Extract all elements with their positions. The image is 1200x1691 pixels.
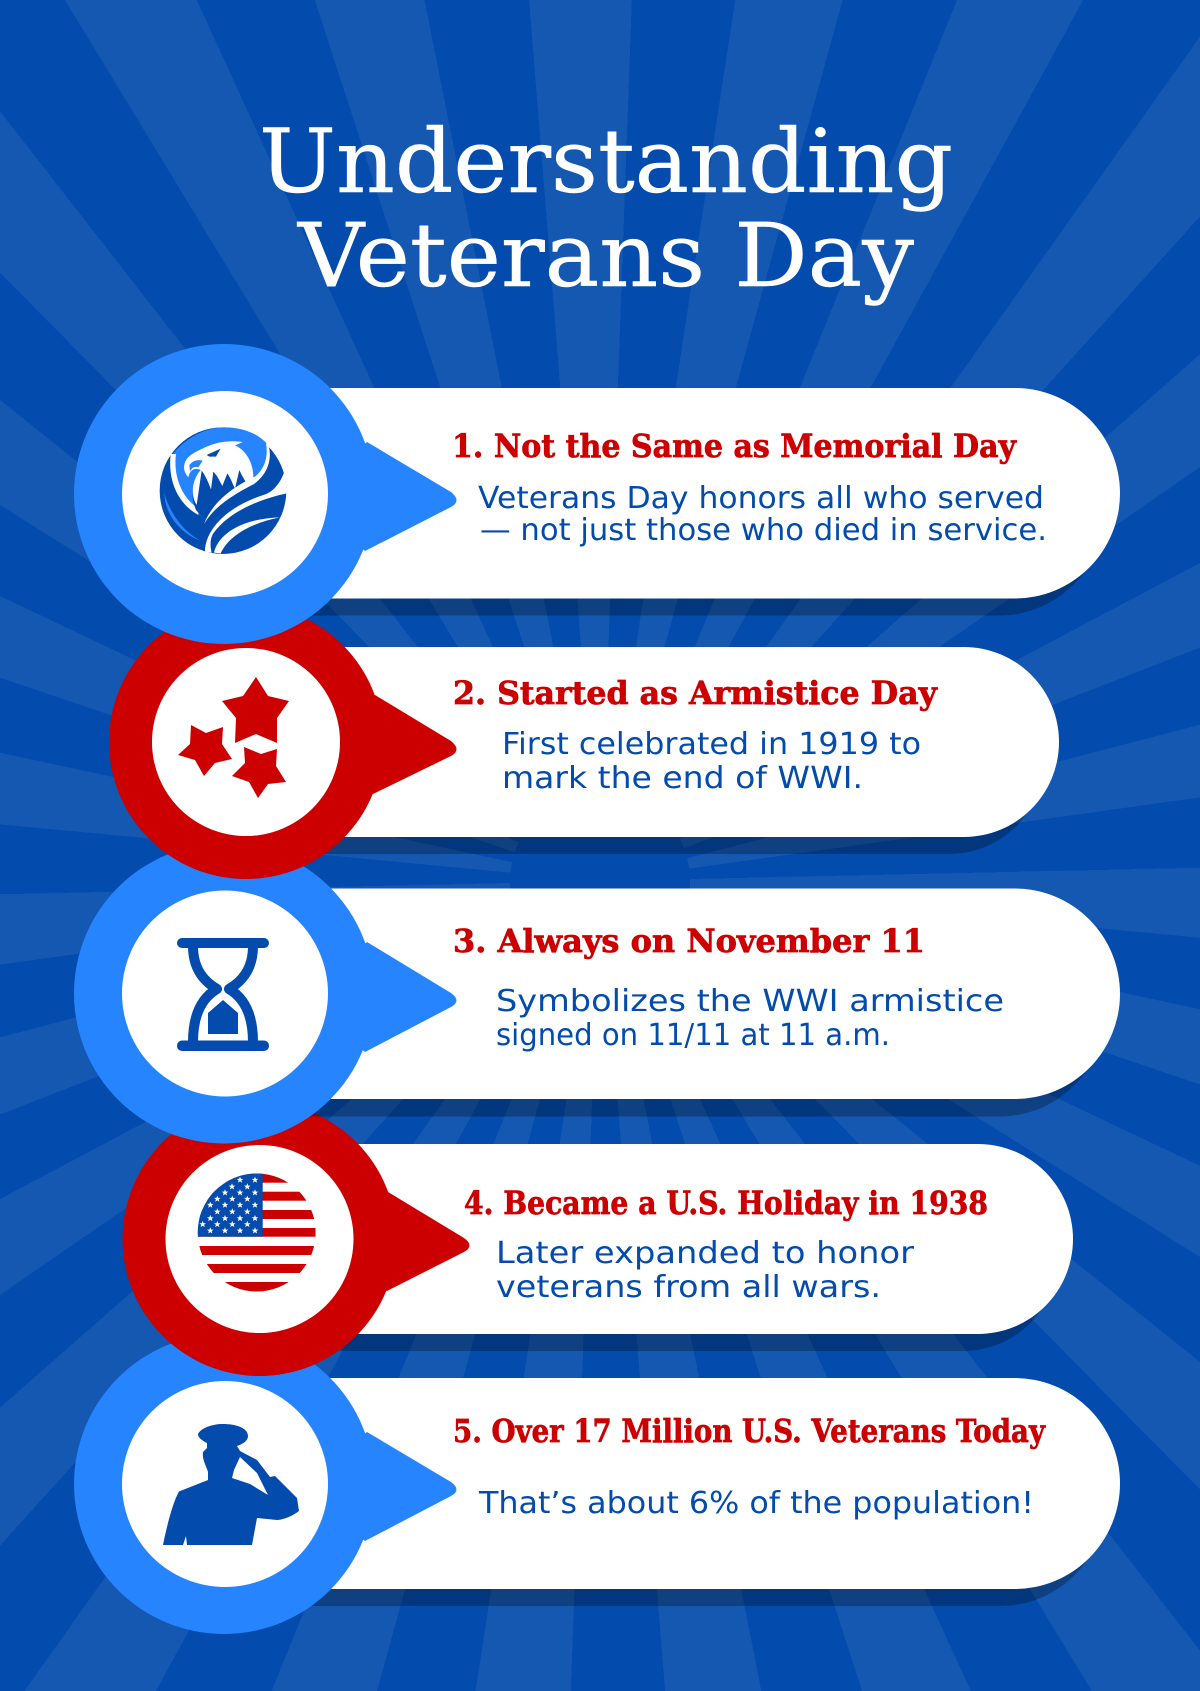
icon badge: saluting soldier — [74, 1334, 456, 1634]
text: fact 4 body: Later expanded to honor — [496, 1236, 915, 1271]
text: fact 4 body: veterans from all wars. — [496, 1270, 881, 1305]
text: fact 3 body: signed on 11/11 at 11 a.m. — [496, 1018, 890, 1053]
heading: fact 3: 3. Always on November 11 — [453, 922, 925, 960]
text: fact 1 body: Veterans Day honors all who served — [478, 481, 1044, 516]
icon badge: hourglass — [74, 844, 456, 1144]
text: fact 3 body: Symbolizes the WWI armistice — [496, 984, 1004, 1019]
panel: fact 1 memorial day — [74, 344, 1120, 644]
icon badge: american flag — [122, 1102, 470, 1376]
text: fact 3 body — [496, 984, 1004, 1053]
text: fact 2 body: First celebrated in 1919 to — [502, 727, 921, 762]
title — [259, 110, 953, 307]
icon badge: three stars — [109, 605, 456, 879]
text: fact 5 body: That’s about 6% of the population! — [478, 1486, 1034, 1521]
panel: fact 3 november 11 — [74, 844, 1120, 1144]
heading: fact 1: 1. Not the Same as Memorial Day — [452, 427, 1017, 465]
title: Understanding — [259, 110, 953, 213]
heading: fact 2: 2. Started as Armistice Day — [453, 674, 938, 712]
panel: fact 5 veterans today — [74, 1334, 1120, 1634]
title: Veterans Day — [297, 204, 914, 307]
text: fact 2 body: mark the end of WWI. — [502, 761, 863, 796]
text: fact 4 body — [496, 1236, 915, 1305]
heading: fact 4: 4. Became a U.S. Holiday in 1938 — [464, 1184, 988, 1222]
heading: fact 5: 5. Over 17 Million U.S. Veterans Today — [453, 1412, 1046, 1450]
panel: fact 4 holiday — [122, 1102, 1073, 1376]
text: fact 2 body — [502, 727, 921, 796]
icon badge: eagle emblem — [74, 344, 456, 644]
text: fact 1 body: — not just those who died in service. — [480, 513, 1047, 548]
text: fact 1 body — [478, 481, 1047, 548]
panel: fact 2 armistice day — [109, 605, 1059, 879]
